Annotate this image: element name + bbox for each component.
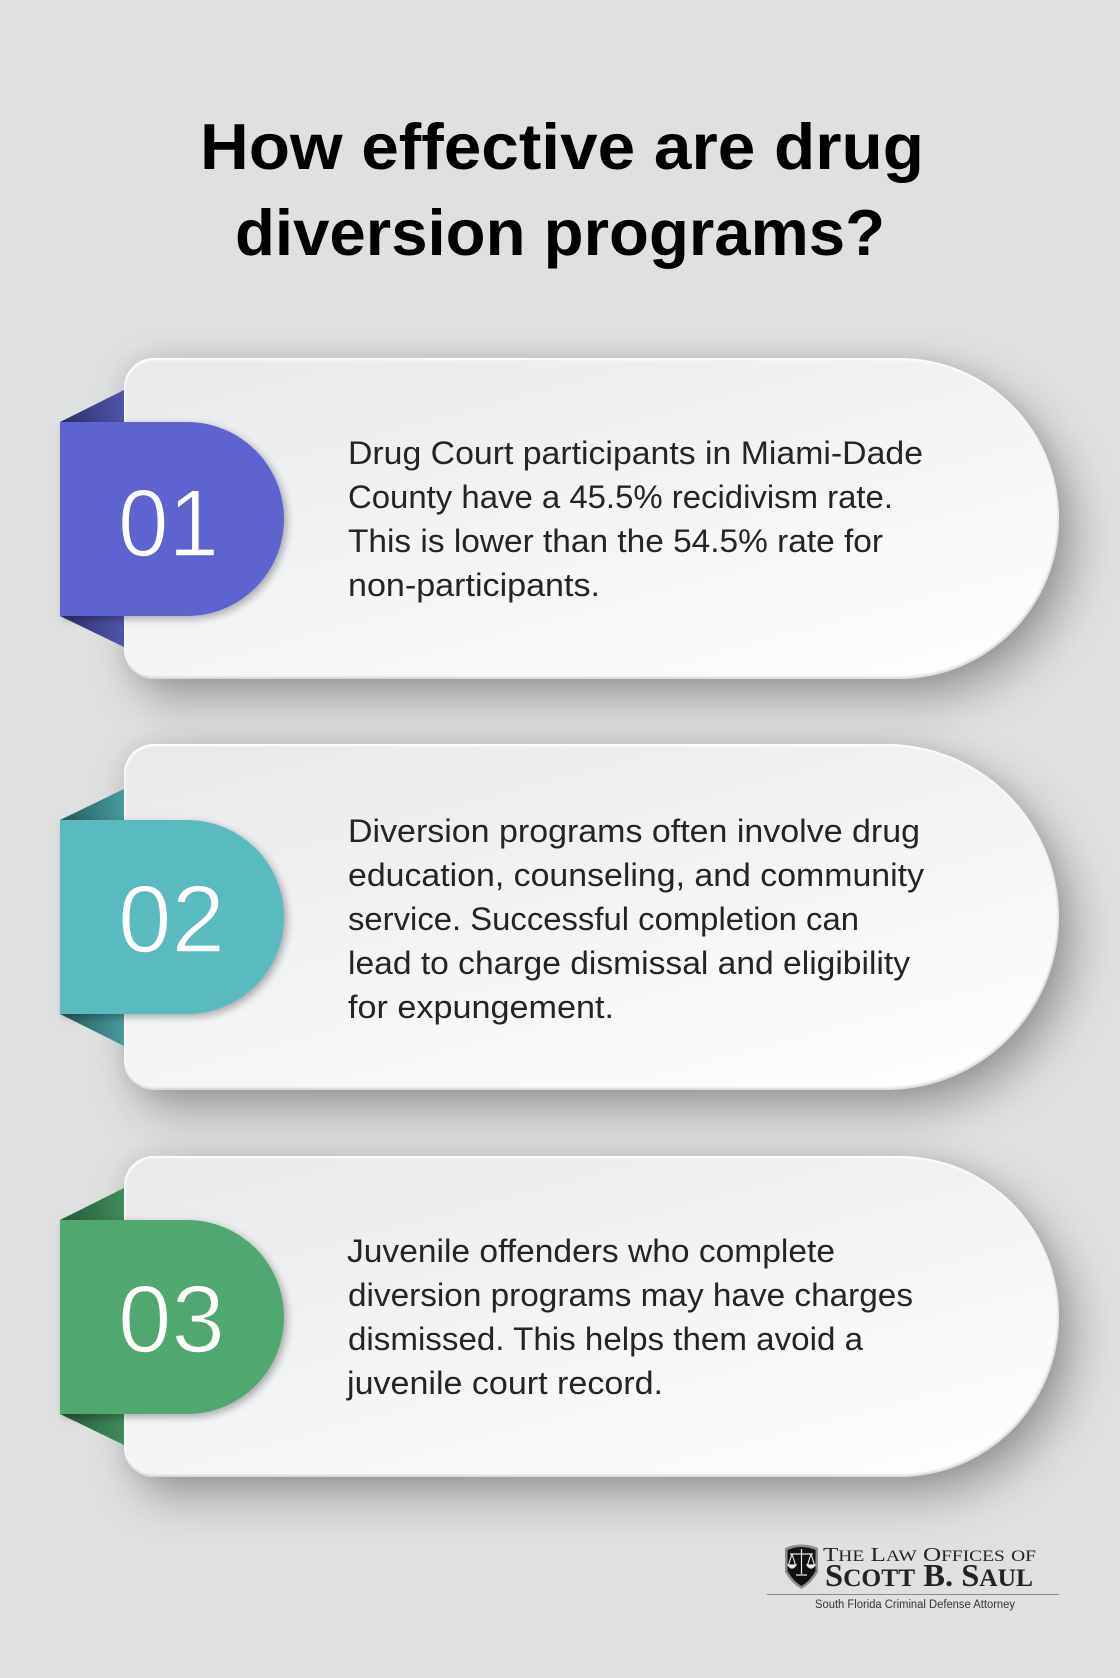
tagline: South Florida Criminal Defense Attorney [815,1599,1015,1611]
body text 03: diversion programs may have charges [348,1277,913,1313]
panel: step 01 [58,345,1098,724]
card 02 background [124,744,1059,1090]
ribbon folds 01 [60,390,124,647]
number badge 03 [60,1220,284,1414]
firm name: THE L AW O FFICES OF [823,1544,1036,1566]
body text 02: Diversion programs often involve drug [348,813,920,849]
body text 02 [348,813,924,1025]
card 03 background [124,1156,1059,1477]
body text 01: This is lower than the 54.5% rate for [348,523,883,559]
number 02: 02 [118,866,225,973]
body text 03: juvenile court record. [346,1365,663,1401]
body text 03: Juvenile offenders who complete [347,1233,835,1269]
ribbon folds 02 [60,789,124,1046]
body text 01: non-participants. [348,567,600,603]
icon: shield with scales [785,1544,818,1589]
body text 02: for expungement. [348,989,614,1025]
number 03: 03 [118,1266,225,1373]
number badge 02 [60,820,284,1014]
firm name: SCOTT B. SAUL [825,1557,1033,1593]
title: How effective are drug [200,110,924,183]
panel: step 02 [58,732,1098,1134]
card 01 background [124,358,1059,679]
body text 02: service. Successful completion can [348,901,859,937]
body text 03: dismissed. This helps them avoid a [348,1321,863,1357]
body text 02: education, counseling, and community [348,857,924,893]
title [200,110,924,269]
number badge 01 [60,422,284,616]
body text 01: Drug Court participants in Miami-Dade [348,435,923,471]
body text 01 [348,435,923,603]
body text 01: County have a 45.5% recidivism rate. [348,479,893,515]
title: diversion programs? [235,196,885,269]
number 01: 01 [118,470,219,577]
ribbon folds 03 [60,1188,124,1445]
body text 02: lead to charge dismissal and eligibility [348,945,910,981]
